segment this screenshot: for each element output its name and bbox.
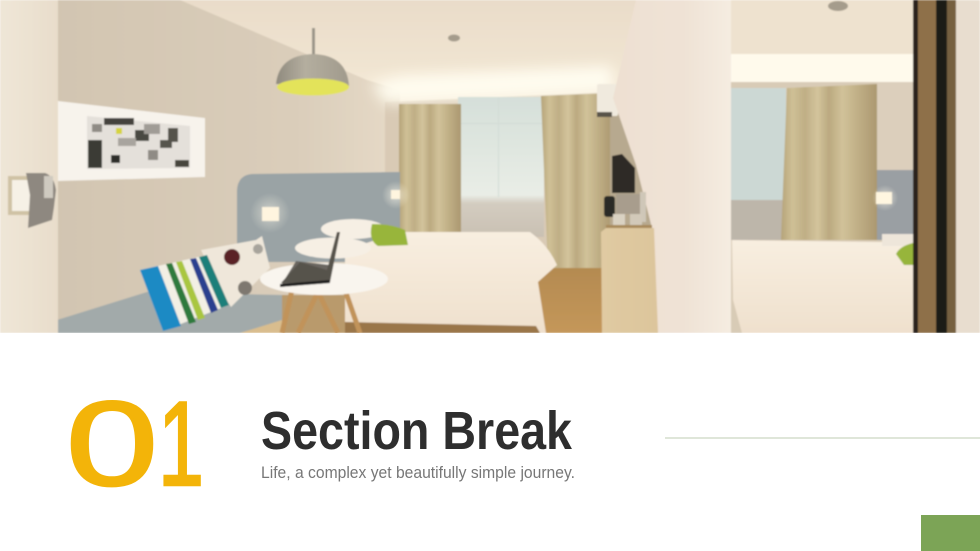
- mirror window: [730, 88, 786, 200]
- pillar: [0, 0, 58, 333]
- table legs: [282, 290, 360, 333]
- picture frame: [58, 101, 205, 181]
- bench: [57, 292, 282, 333]
- bed: [345, 232, 557, 333]
- bed base: [345, 322, 540, 333]
- ceiling light strip: [372, 66, 612, 103]
- mirror lamp: [876, 192, 892, 204]
- curtain: right: [541, 93, 612, 268]
- laptop: [280, 232, 340, 287]
- mirror light strip: [731, 54, 913, 82]
- mirror headboard: [877, 170, 913, 240]
- subtitle: Life, a complex yet beautifully simple journey.: [261, 463, 575, 482]
- mirror: [731, 0, 913, 333]
- green pillow: [371, 224, 408, 246]
- table top: [260, 263, 388, 295]
- photo: hotel room: [0, 0, 980, 333]
- air conditioner: [597, 84, 618, 117]
- television: [612, 154, 635, 193]
- title: Section Break: [261, 401, 573, 461]
- divider line: [665, 437, 980, 439]
- cabinet: [601, 228, 658, 333]
- striped cushion: [140, 255, 229, 331]
- wall behind television: [610, 114, 652, 226]
- area under table: [282, 295, 352, 333]
- kettle and cups: [604, 192, 652, 229]
- window: [458, 97, 544, 237]
- door frame: [913, 0, 956, 333]
- floor: [538, 267, 603, 333]
- mirror smoke detector: [828, 1, 848, 11]
- ceiling: [180, 0, 636, 101]
- section number: [66, 377, 204, 511]
- wall lamp glow: [253, 196, 287, 230]
- section number: 1: [158, 377, 204, 511]
- dividing wall: [613, 0, 731, 333]
- smoke detector: [448, 34, 460, 42]
- green corner block: [921, 515, 980, 551]
- wall lamps: [262, 207, 279, 221]
- mirror bed: [732, 240, 913, 333]
- pendant lamp: [276, 28, 349, 96]
- mirror green pillow: [896, 243, 913, 265]
- headboard: [237, 172, 400, 262]
- pillows: [321, 219, 385, 239]
- mirror back wall: [877, 82, 913, 172]
- mirror curtain: [781, 84, 877, 240]
- left wall: [58, 0, 400, 333]
- light switch and key holder: [8, 173, 56, 228]
- curtain: left: [399, 104, 461, 234]
- polka dot cushion: [201, 236, 270, 307]
- back wall: [385, 93, 596, 248]
- section number: 0: [66, 377, 158, 511]
- right wall: [956, 0, 980, 333]
- mirror ceiling: [731, 0, 913, 60]
